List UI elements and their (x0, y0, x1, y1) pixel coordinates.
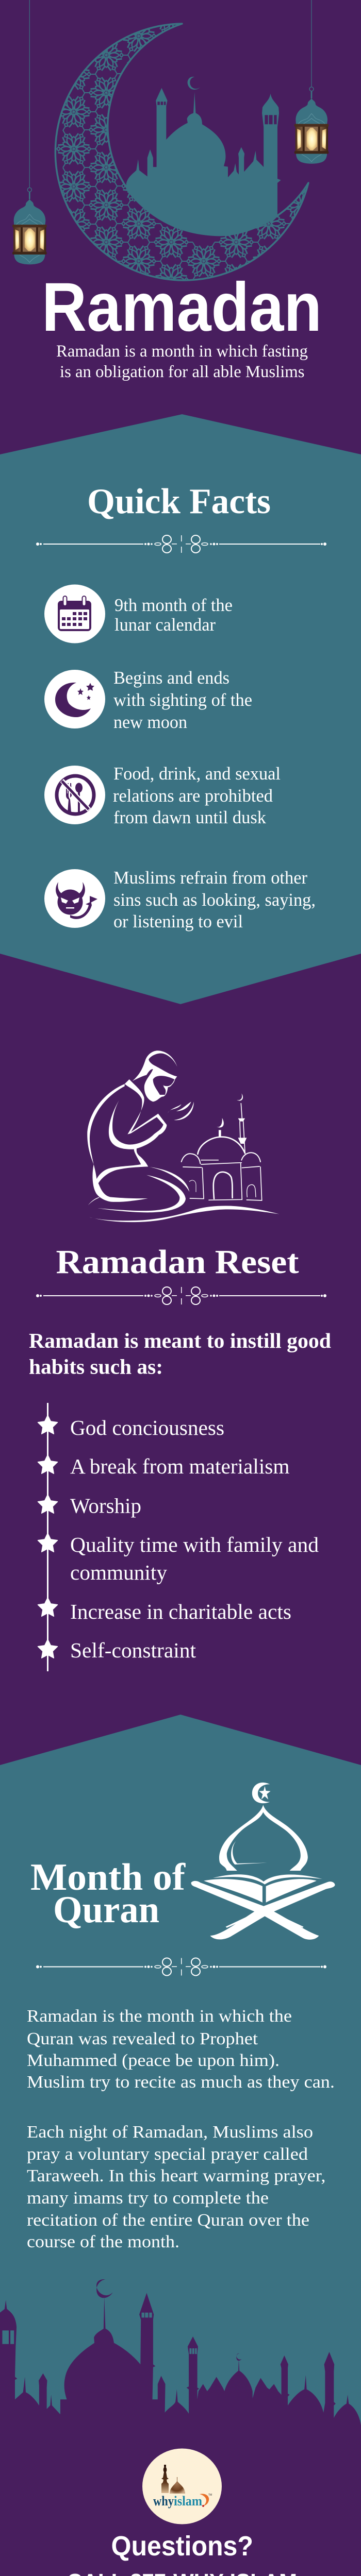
paragraph 2: many imams try to complete the (27, 2189, 269, 2208)
paragraph 2: pray a voluntary special prayer called (27, 2145, 308, 2164)
panel: quick facts (0, 414, 361, 1004)
heading: Month of Quran (30, 1856, 186, 1931)
logo wordmark: islam (174, 2494, 202, 2509)
panel: ramadan reset (29, 1050, 331, 1671)
icon: devil (44, 869, 105, 928)
title: Ramadan (42, 269, 322, 346)
paragraph 2: recitation of the entire Quran over the (27, 2211, 309, 2230)
heading: Month of Quran: Month of (30, 1856, 186, 1899)
panel: footer (67, 2448, 297, 2576)
fact text: relations are prohibted (113, 786, 273, 806)
logo: WhyIslam (142, 2448, 222, 2524)
item: self-constraint: Self-constraint (70, 1638, 196, 1662)
subtitle: Ramadan is a month in which fasting (56, 342, 308, 361)
logo wordmark: why (153, 2494, 174, 2509)
fact: fasting (44, 764, 281, 827)
heading: Ramadan Reset: Ramadan Reset (56, 1243, 299, 1281)
icon: left hanging lantern (12, 0, 47, 264)
icon: moon and stars (44, 670, 105, 728)
teal chevron background (0, 414, 361, 1004)
item: quality time: Quality time with family and (70, 1533, 319, 1556)
heading: Questions?: Questions? (111, 2531, 253, 2562)
intro text (29, 1329, 331, 1379)
intro text: habits such as: (29, 1355, 163, 1379)
fact text: Begins and ends (113, 668, 229, 688)
paragraph 1: Quran was revealed to Prophet (27, 2029, 258, 2048)
fact: 9th month (44, 584, 233, 643)
icon: minaret and dome (161, 2465, 185, 2494)
subtitle: is an obligation for all able Muslims (60, 363, 304, 381)
subtitle (56, 342, 308, 381)
item: God consciousness: God conciousness (70, 1416, 224, 1439)
heading: Month of Quran: Quran (53, 1889, 159, 1931)
fact text: Muslims refrain from other (113, 868, 307, 888)
fact text (114, 596, 233, 635)
paragraph 2: course of the month. (27, 2232, 179, 2251)
icon: mosque silhouette (126, 77, 281, 236)
fact text: Food, drink, and sexual (113, 764, 281, 784)
item: quality time (38, 1533, 319, 1584)
paragraph 2 (27, 2123, 326, 2251)
fact text: lunar calendar (114, 615, 216, 635)
panel: hero (12, 0, 329, 381)
fact: new moon (44, 668, 252, 732)
fact text: with sighting of the (113, 690, 252, 710)
icon: patterned crescent moon (55, 23, 309, 281)
item: worship (38, 1494, 141, 1518)
icon: man praying beside mosque (87, 1050, 280, 1222)
paragraph 1 (27, 2007, 335, 2092)
item: break from materialism: A break from materialism (70, 1454, 290, 1478)
skyline silhouette (0, 2279, 361, 2576)
logo wordmark (153, 2494, 212, 2509)
panel: month of quran (0, 1715, 361, 2473)
fact text (113, 668, 252, 732)
icon: Quran on stand under dome (191, 1783, 335, 1940)
fact text (113, 868, 316, 931)
paragraph 1: Muhammed (peace be upon him). (27, 2051, 280, 2070)
icon: right hanging lantern (294, 0, 329, 164)
icon: calendar (44, 584, 105, 643)
fact text: or listening to evil (113, 912, 243, 931)
fact text: new moon (113, 713, 187, 732)
paragraph 1: Ramadan is the month in which the (27, 2007, 292, 2026)
paragraph 2: Taraweeh. In this heart warming prayer, (27, 2166, 326, 2185)
list of habits (38, 1403, 319, 1671)
intro text: Ramadan is meant to instill good (29, 1329, 331, 1352)
fact: refrain from sins (44, 868, 316, 931)
fact text: 9th month of the (114, 596, 233, 615)
icon: prohibited food (44, 766, 105, 824)
paragraph 1: Muslim try to recite as much as they can. (27, 2073, 335, 2092)
heading: Quick Facts: Quick Facts (87, 482, 271, 521)
item: charitable acts: Increase in charitable acts (70, 1600, 291, 1623)
fact text: from dawn until dusk (113, 808, 267, 827)
item: quality time: community (70, 1561, 167, 1584)
fact text (113, 764, 281, 827)
item: worship: Worship (70, 1494, 141, 1518)
logo wordmark: TM (208, 2494, 212, 2497)
paragraph 2: Each night of Ramadan, Muslims also (27, 2123, 313, 2142)
teal background (0, 1715, 361, 2473)
fact text: sins such as looking, saying, (113, 890, 316, 910)
